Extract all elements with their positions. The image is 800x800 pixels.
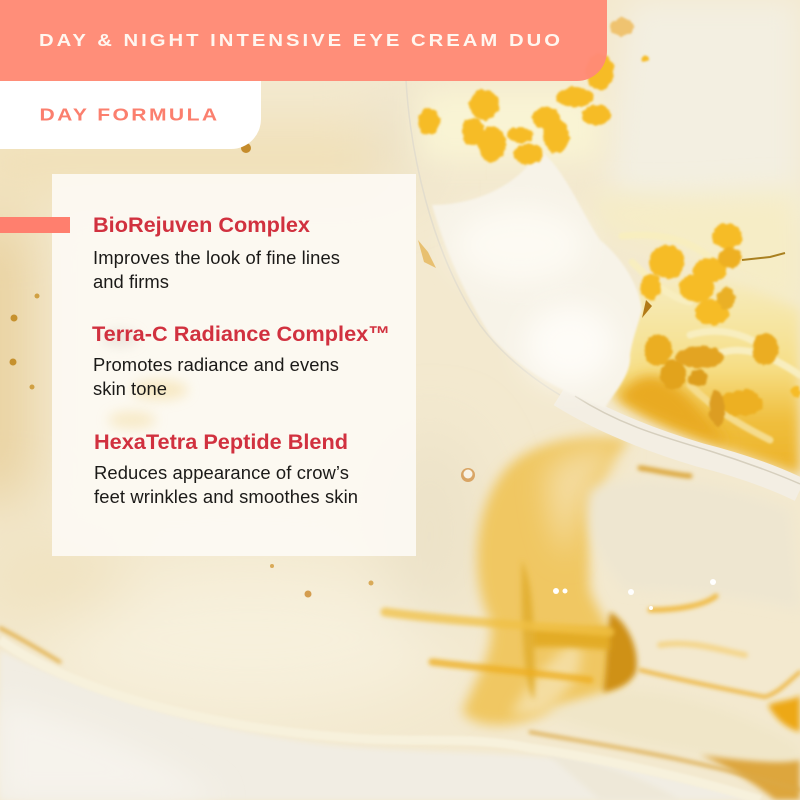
text: BioRejuven description: and firms xyxy=(93,271,169,292)
pollen clusters xyxy=(418,18,800,427)
card tint: translucent amber smudge xyxy=(102,330,188,429)
panel: ingredient card xyxy=(52,174,416,556)
heading: HexaTetra Peptide Blend: HexaTetra Peptide Blend xyxy=(94,430,348,454)
droplets xyxy=(10,143,716,610)
tab label: DAY FORMULA xyxy=(40,104,220,124)
header banner xyxy=(0,0,607,81)
tab: day formula xyxy=(0,81,261,149)
gold flower interior xyxy=(612,276,800,475)
text: BioRejuven description: Improves the look of fine lines xyxy=(93,247,340,268)
accent bar xyxy=(0,217,70,233)
upper right petal xyxy=(610,0,800,230)
stamen filaments xyxy=(622,235,800,440)
title: DAY & NIGHT INTENSIVE EYE CREAM DUO xyxy=(39,30,563,50)
dark amber core and streaks xyxy=(522,560,800,800)
glass rim curve xyxy=(406,80,800,490)
text: HexaTetra description: Reduces appearance of crow’s xyxy=(94,462,349,483)
left tan wash xyxy=(0,90,480,710)
gold swirl xyxy=(462,437,630,725)
heading: Terra-C Radiance Complex: Terra-C Radiance Complex™ xyxy=(92,322,390,346)
bottom white fabric xyxy=(0,650,760,800)
swirl pale centre xyxy=(587,480,800,610)
text: Terra-C description: skin tone xyxy=(93,378,167,399)
text: HexaTetra description: feet wrinkles and smoothes skin xyxy=(94,486,358,507)
cream dollop xyxy=(432,150,642,408)
lower rim of petal xyxy=(0,640,760,800)
text: Terra-C description: Promotes radiance and evens xyxy=(93,354,339,375)
heading: BioRejuven Complex: BioRejuven Complex xyxy=(93,213,310,237)
